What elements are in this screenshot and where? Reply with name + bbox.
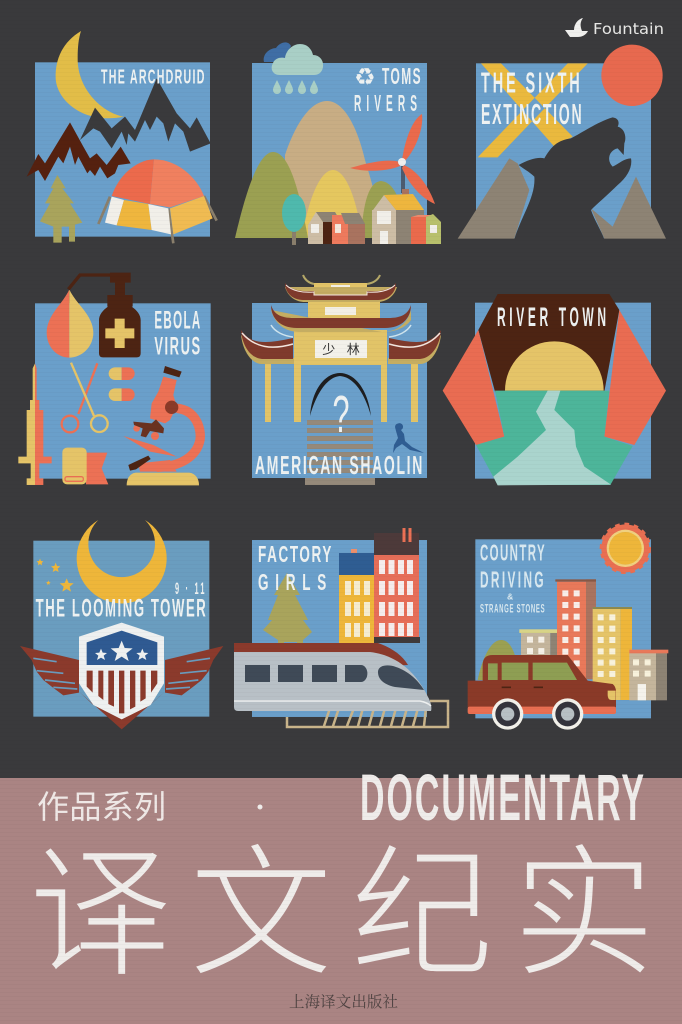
icon: pine tree [263, 573, 312, 650]
panel: American Shaolin [241, 275, 441, 485]
title: The Sixth Extinction [481, 68, 583, 131]
title: Toms River [354, 63, 422, 116]
icon: yellow building [339, 549, 374, 643]
icon: recycling symbol: ♻ [354, 63, 376, 91]
icon: pump bottle [68, 273, 141, 357]
icon: microscope [123, 366, 200, 485]
icon: wind turbine [350, 114, 435, 204]
title: Country Driving & Strange Stones: & [507, 591, 514, 601]
icon: setting sun [505, 341, 604, 391]
icon: left bank [443, 330, 504, 445]
icon: crescent moon [56, 31, 124, 118]
icon: stacked bricks [305, 420, 375, 485]
icon: red sun [601, 45, 663, 106]
heading: main Chinese title [29, 835, 655, 994]
panel: Factory Girls [234, 528, 448, 727]
title: Country Driving & Strange Stones: DRIVING [480, 566, 546, 592]
title: The Archdruid: THE ARCHDRUID [101, 65, 206, 88]
icon: dark cliff [478, 294, 619, 392]
icon: bandage [62, 448, 108, 484]
heading: main Chinese title: 文 [190, 835, 332, 994]
sign: Shaolin [315, 340, 367, 358]
icon: red building [374, 528, 420, 643]
title: Ebola Virus: VIRUS [154, 333, 202, 360]
title: American Shaolin: AMERICAN SHAOLIN [255, 450, 424, 480]
text: publisher: 上海译文出版社 [289, 993, 398, 1011]
icon: storm cloud [264, 42, 323, 94]
sign: Shaolin: 少 林 [322, 342, 360, 357]
icon: pine tree [40, 175, 82, 243]
icon: dark mountains [80, 78, 211, 152]
icon: blood drop [47, 289, 93, 358]
title: 9·11 The Looming Tower: THE LOOMING TOWER [36, 595, 207, 623]
icon: spiky sun [601, 524, 649, 572]
icon: wings [20, 646, 223, 729]
panel: The Sixth Extinction [458, 45, 666, 239]
heading: main Chinese title: 实 [513, 835, 655, 994]
panel: Toms River: RIVERS [354, 90, 422, 116]
icon: brown mountains [27, 122, 131, 181]
panel: The Archdruid [27, 31, 217, 243]
panel: Toms River [235, 42, 441, 245]
icon: olive hill right [361, 181, 402, 238]
heading: main Chinese title: 译 [29, 835, 171, 994]
icon: right bank [604, 310, 666, 445]
title: The Sixth Extinction: THE SIXTH [481, 68, 583, 100]
icon: kung fu figure [393, 423, 424, 453]
panel: River Town [443, 294, 666, 485]
icon: pills [109, 367, 135, 401]
icon: crescent moon [77, 520, 167, 603]
title: Country Driving & Strange Stones: STRANGE STONES [480, 602, 545, 616]
heading: main Chinese title: 纪 [351, 835, 493, 994]
icon: yellow X [478, 63, 588, 157]
title: Factory Girls: FACTORY [258, 541, 333, 567]
title: Country Driving & Strange Stones [480, 540, 546, 616]
icon: yellow hill [302, 170, 362, 238]
title: Factory Girls: GIRLS [258, 569, 333, 595]
icon: city buildings [478, 579, 668, 700]
icon: river [493, 391, 611, 485]
icon: howling wolf [514, 117, 631, 239]
icon: teal tree [282, 194, 306, 245]
title: Ebola Virus [154, 307, 202, 360]
icon: stars [37, 559, 74, 592]
band: pink title panel [0, 778, 682, 1024]
icon: green fields [476, 391, 633, 485]
icon: track [287, 701, 448, 727]
icon: tent [98, 159, 217, 243]
text: series label: 作品系列 [37, 789, 166, 825]
icon: mountains [458, 158, 666, 239]
icon: shield [79, 623, 164, 719]
question mark: ? [332, 386, 350, 444]
title: Factory Girls [258, 541, 333, 595]
icon: scissors [62, 363, 108, 432]
title: Toms River: TOMS [382, 63, 422, 89]
panel: The Looming Tower: 9 · 11 [175, 579, 207, 598]
panel: Country Driving [468, 524, 668, 730]
title: 9·11 The Looming Tower [36, 579, 207, 623]
icon: houses [308, 189, 441, 244]
icon: train [234, 643, 431, 711]
icon: olive hill left [235, 152, 308, 238]
panel: Ebola Virus [18, 273, 211, 485]
icon: beige mountain [285, 101, 376, 238]
icon: arch [310, 373, 371, 416]
panel: Country Driving: COUNTRY [480, 540, 546, 566]
icon: red car [468, 655, 616, 730]
icon: syringe [18, 363, 52, 485]
logo: Fountain [565, 18, 664, 38]
dot [258, 804, 262, 810]
icon: temple gate [241, 275, 441, 422]
panel: The Looming Tower [20, 520, 223, 729]
logo: Fountain: Fountain [593, 20, 664, 38]
panel: Ebola Virus: EBOLA [154, 307, 202, 334]
